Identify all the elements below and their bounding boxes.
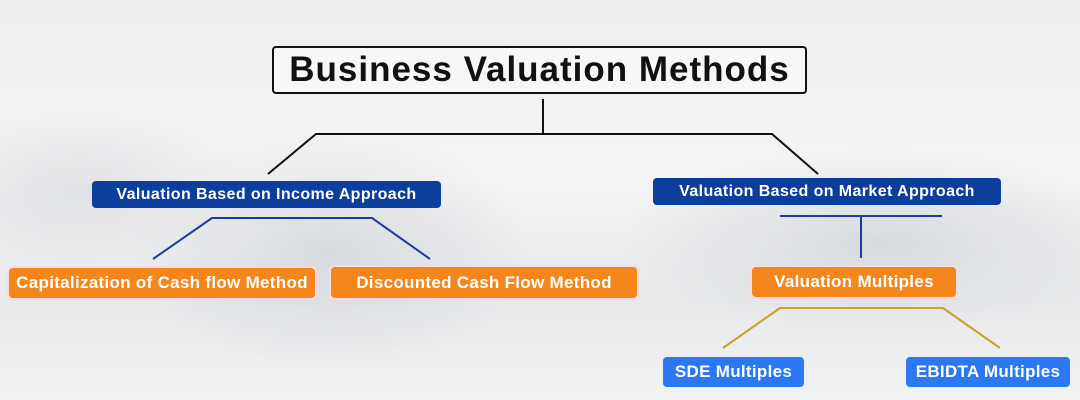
ebidta [906, 357, 1070, 387]
title: Business Valuation Methods [289, 50, 790, 89]
sde: SDE Multiples [675, 362, 792, 381]
income approach [92, 181, 441, 208]
ebidta: EBIDTA Multiples [916, 362, 1060, 381]
valuation multiples [752, 267, 956, 297]
capitalization [9, 268, 315, 298]
market approach: Valuation Based on Market Approach [679, 182, 975, 200]
capitalization: Capitalization of Cash flow Method [16, 273, 308, 292]
dcf [331, 267, 637, 298]
income approach: Valuation Based on Income Approach [116, 186, 417, 202]
valuation multiples: Valuation Multiples [774, 272, 934, 291]
dcf: Discounted Cash Flow Method [356, 272, 612, 292]
market approach [653, 178, 1001, 205]
sde [663, 357, 804, 387]
